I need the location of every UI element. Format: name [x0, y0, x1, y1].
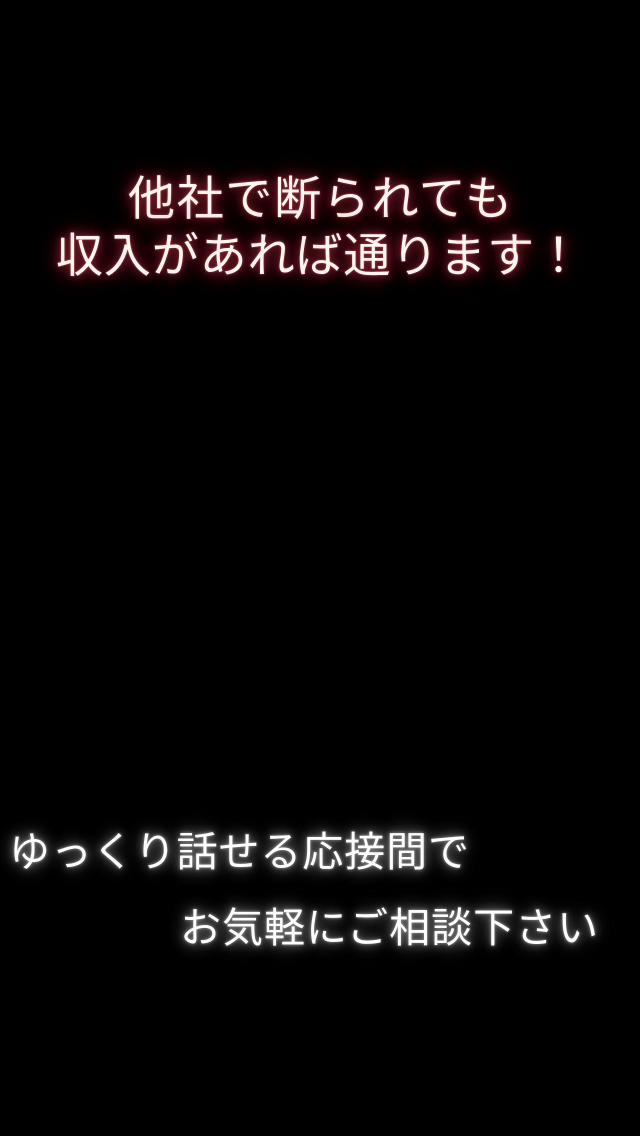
caption line 2: お気軽にご相談下さい [180, 905, 599, 951]
caption line 1: ゆっくり話せる応接間で [9, 829, 470, 875]
caption: white glow text [4, 821, 603, 956]
heading: red glow text [46, 163, 583, 290]
heading line 1: 他社で断られても [128, 172, 514, 225]
heading line 2: 収入があれば通ります！ [56, 229, 583, 282]
